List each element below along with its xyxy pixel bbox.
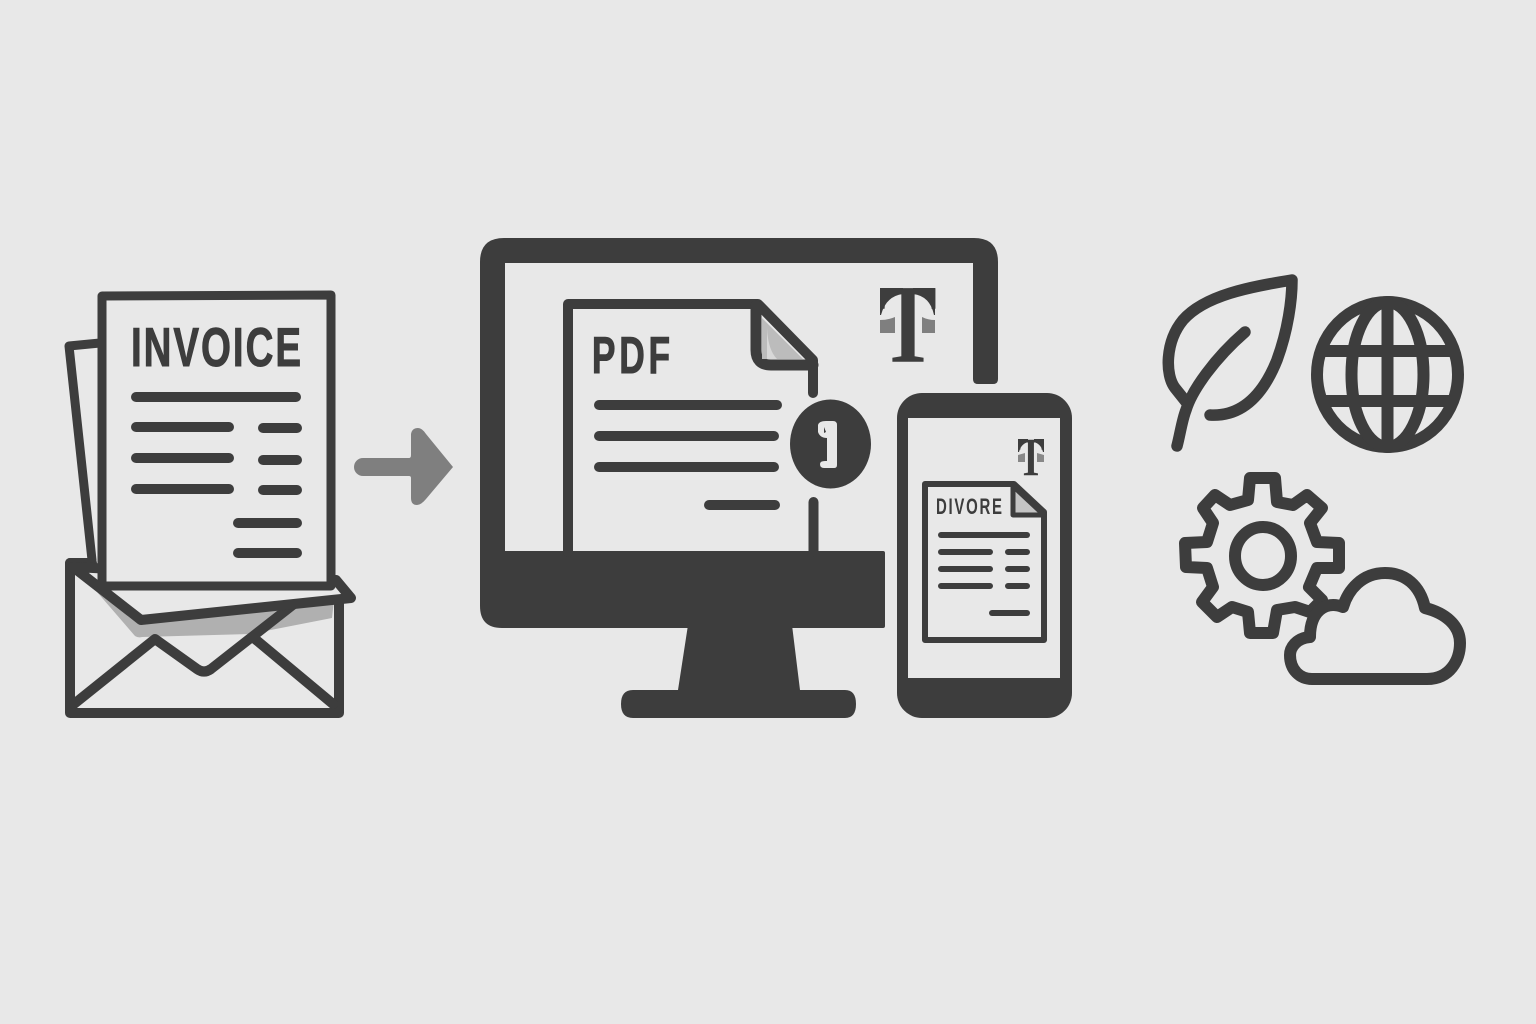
phone document fold (1013, 486, 1044, 515)
phone document label: DIVORE (936, 494, 1002, 519)
arrow (354, 428, 453, 505)
icon: phone (897, 393, 1072, 718)
monitor stand (621, 625, 856, 718)
icon: cloud (1290, 573, 1460, 679)
icon: globe (1317, 302, 1458, 447)
monitor frame (480, 238, 998, 606)
icon: gear (1185, 478, 1339, 633)
envelope inner folds (74, 604, 333, 704)
envelope body (70, 563, 339, 713)
phone t logo: T (1018, 428, 1044, 488)
back sheet (69, 343, 100, 560)
phone document (925, 484, 1044, 640)
monitor base panel (480, 551, 885, 628)
icon: invoice in envelope (69, 295, 351, 713)
phone screen (908, 418, 1060, 678)
icon: desktop monitor (480, 238, 998, 718)
invoice lines (136, 397, 297, 553)
envelope flap (73, 567, 351, 620)
envelope flap shadow (97, 592, 334, 637)
envelope top left edge (70, 558, 92, 568)
pdf document (568, 304, 814, 552)
badge (790, 400, 871, 488)
invoice label: INVOICE (131, 317, 301, 379)
icon: leaf (1168, 280, 1292, 446)
page fold (756, 306, 813, 365)
pdf text lines (599, 405, 777, 505)
phone document lines (941, 535, 1027, 613)
pdf label: PDF (592, 327, 670, 385)
invoice sheet (102, 295, 331, 586)
phone body (897, 393, 1072, 718)
t logo: T (879, 262, 937, 387)
